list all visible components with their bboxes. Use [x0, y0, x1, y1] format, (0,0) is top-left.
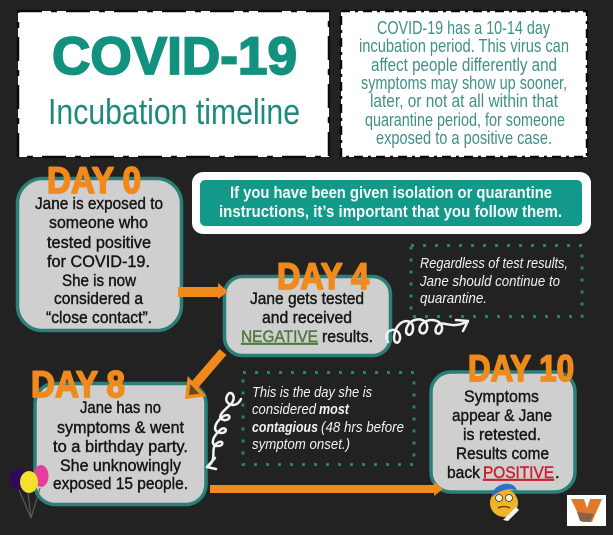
- panel: day 8: to a birthday party.: [53, 438, 188, 456]
- label: day 10: DAY 10: [468, 348, 574, 389]
- panel: day 4: and received: [262, 309, 352, 327]
- panel: day 8: Jane has no: [80, 399, 161, 417]
- panel: day 0: She is now: [62, 272, 136, 290]
- heading: COVID-19: COVID-19: [52, 27, 297, 86]
- panel: day 10: [431, 372, 575, 492]
- panel: incubation period explanation: [341, 11, 587, 157]
- panel: incubation period explanation: affect people differently and: [371, 54, 557, 75]
- panel: day 8: symptoms & went: [57, 419, 184, 437]
- callout: most contagious day: considered: [252, 402, 317, 418]
- callout: most contagious day: [243, 372, 414, 464]
- callout: most contagious day: most: [319, 402, 350, 418]
- panel: day 4: NEGATIVE: [241, 328, 318, 346]
- icon: school logo: [567, 495, 606, 526]
- panel: day 0: [18, 178, 182, 330]
- panel: day 0: considered a: [54, 290, 144, 308]
- panel: title: [18, 11, 329, 157]
- arrow: squiggle to day 8: [207, 393, 241, 469]
- panel: day 10: is retested.: [463, 426, 541, 444]
- panel: day 0: “close contact”.: [46, 309, 152, 327]
- panel: day 8: [35, 384, 206, 504]
- arrow: day 8 to day 10: [210, 482, 443, 496]
- callout: most contagious day: (48 hrs before: [321, 420, 404, 436]
- callout: most contagious day: symptom onset.): [252, 437, 350, 453]
- icon: balloons: [10, 465, 48, 518]
- panel: day 8: exposed 15 people.: [53, 475, 188, 493]
- arrow: day 4 to day 8: [187, 352, 223, 397]
- arrow: squiggle to day 4 callout: [386, 319, 468, 343]
- panel: day 4: [224, 276, 390, 356]
- subheading: Incubation timeline: Incubation timeline: [48, 91, 300, 132]
- panel: quarantine instructions banner: [192, 172, 591, 234]
- panel: day 10: back: [447, 464, 481, 482]
- panel: day 10: .: [555, 464, 560, 482]
- panel: day 10: POSITIVE: [483, 464, 554, 482]
- callout: regardless of test results: [411, 246, 582, 316]
- panel: day 0: for COVID-19.: [47, 253, 150, 271]
- panel: quarantine instructions banner: instructions, it’s important that you follow them.: [219, 202, 562, 221]
- callout: regardless of test results: Jane should continue to: [419, 274, 560, 290]
- label: day 8: DAY 8: [31, 364, 125, 405]
- panel: incubation period explanation: COVID-19 has a 10-14 day: [377, 17, 551, 38]
- callout: regardless of test results: Regardless of test results,: [420, 256, 568, 272]
- panel: day 4: results.: [322, 328, 373, 346]
- panel: day 10: Symptoms: [464, 388, 539, 406]
- callout: most contagious day: This is the day she is: [252, 385, 372, 401]
- label: day 0: DAY 0: [47, 160, 141, 201]
- label: day 4: DAY 4: [277, 256, 369, 297]
- arrow: day 0 to day 4: [178, 283, 228, 299]
- panel: day 4: Jane gets tested: [250, 290, 364, 308]
- panel: quarantine instructions banner: If you have been given isolation or quarantine: [230, 183, 552, 202]
- callout: most contagious day: contagious: [252, 420, 318, 436]
- panel: incubation period explanation: exposed to a positive case.: [376, 127, 552, 148]
- panel: day 0: someone who: [49, 214, 148, 232]
- panel: day 0: tested positive: [47, 234, 151, 252]
- callout: regardless of test results: quarantine.: [420, 291, 487, 307]
- panel: day 10: Results come: [456, 445, 549, 463]
- panel: day 10: appear & Jane: [452, 407, 552, 425]
- panel: incubation period explanation: later, or not at all within that: [370, 90, 558, 111]
- panel: day 8: She unknowingly: [60, 457, 182, 475]
- icon: worried face with cap: [490, 484, 519, 521]
- panel: day 0: Jane is exposed to: [35, 195, 163, 213]
